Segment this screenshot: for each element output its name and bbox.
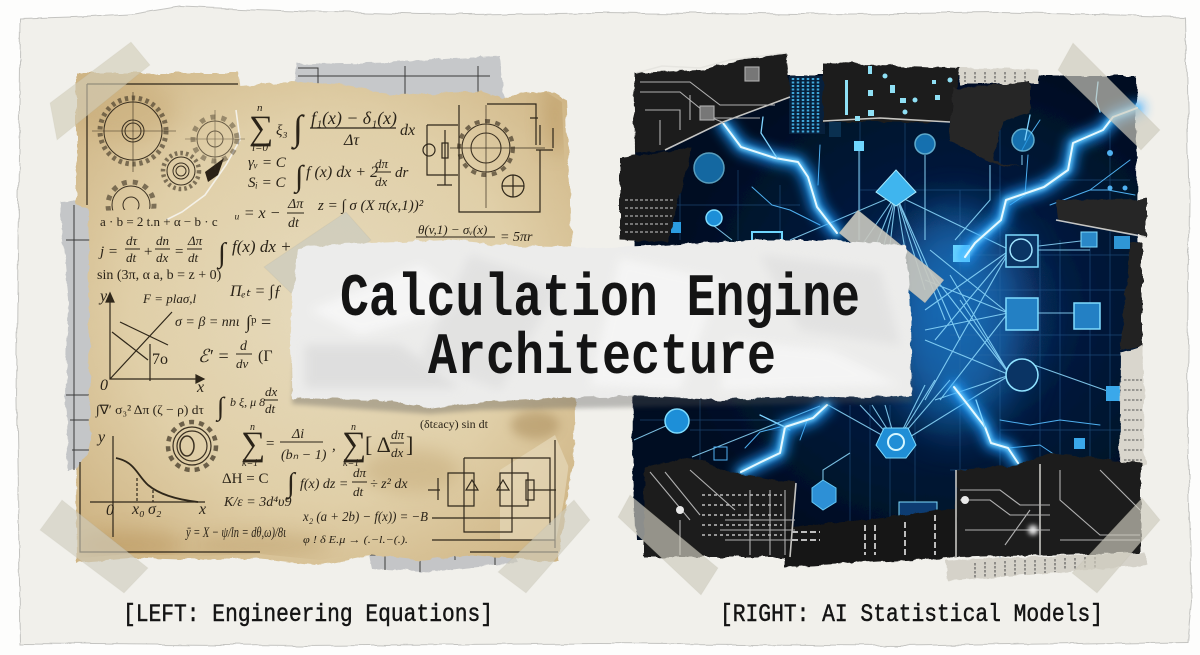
burn mark [205, 158, 224, 182]
equations: Δi [291, 427, 304, 442]
equations: Δτ [343, 132, 360, 149]
equations: ∫∇′ σ₃² Δπ (ζ − ρ) dτ [95, 402, 204, 418]
equations: k=1 [343, 458, 359, 469]
equations [95, 102, 533, 546]
equations: ∫ᵖ = [245, 312, 271, 333]
tape: behind title [264, 210, 944, 303]
equations: j = [98, 244, 118, 260]
equations: dt [288, 216, 300, 231]
title: Architecture [428, 326, 776, 391]
equations: (δtεacy) sin dt [420, 417, 489, 431]
equations: sin (3π, α a, b = z + 0) [97, 268, 222, 283]
equations: dr [395, 165, 408, 181]
equations: ] [406, 432, 413, 457]
graph: vector axes [98, 288, 204, 396]
equations: ᵤ = x − [234, 205, 280, 222]
equations: Δπ [187, 233, 203, 248]
equations: dt [353, 484, 364, 499]
tape: right panel corners [618, 43, 1160, 595]
graph: decay curve: σ₂ [148, 501, 162, 518]
navy circuit field [633, 76, 1138, 540]
graph: decay curve [90, 429, 206, 537]
equations: dx [400, 122, 415, 139]
blue code column [789, 76, 841, 137]
equations: (Γ [258, 348, 273, 365]
nodes [665, 129, 1130, 518]
equations: z = ∫ σ (X π(x,1))² [317, 198, 424, 214]
equations: ∫ [216, 238, 228, 270]
equations: ∫ [215, 392, 226, 422]
equations: φ ! δ E.μ → (.−l.−(.). [303, 534, 408, 546]
stains [75, 80, 570, 559]
equations: dπ [375, 156, 388, 171]
newspaper print [965, 72, 1142, 578]
equations: b ξ, μ 8 [230, 395, 265, 409]
equations: F = plaσ,l [142, 291, 196, 306]
graph: decay curve: 0 [106, 502, 114, 519]
equations: ∑ [249, 110, 273, 147]
equations: n [351, 422, 356, 433]
equations: ∫ [285, 468, 297, 500]
equations: f₁(x) − δ₁(x) [311, 108, 397, 129]
equations: (bₙ − 1) [281, 448, 327, 463]
equations: ξ₃ [276, 123, 288, 139]
equations: Πₑₜ = ∫ƒ [229, 283, 282, 301]
torn parchment sheets [76, 73, 576, 565]
equations: = [265, 436, 275, 452]
equations: f (x) dx + 2 [306, 164, 378, 181]
graph: vector axes: x [196, 379, 204, 396]
graph: decay curve: x₀ [131, 501, 145, 518]
equations: dt [126, 250, 136, 265]
equations: dx [375, 174, 388, 189]
caption: right: [RIGHT: AI Statistical Models] [720, 600, 1103, 629]
equations: dv [236, 356, 248, 371]
equations: d [240, 339, 248, 354]
panel: AI statistical models (right) [618, 43, 1160, 595]
graph paper scraps behind left sheet [60, 56, 518, 572]
equations: dπ [391, 427, 404, 442]
equations: dx [391, 445, 404, 460]
torn dark scraps [620, 53, 1146, 582]
equations: ∑ [241, 426, 265, 463]
equations: θ(v,1) − σᵥ(x) [418, 222, 487, 237]
tape: left panel corners [40, 42, 590, 593]
equations: i=0 [252, 142, 268, 154]
equations: f(x) dx + [232, 237, 292, 256]
crumple folds [305, 255, 900, 390]
equations: σ = β = nnι [175, 315, 240, 330]
equations: dt [265, 401, 276, 416]
equations: dt [188, 250, 198, 265]
equations: k=1 [242, 458, 258, 469]
equations: [ Δ [365, 432, 391, 457]
equations: ΔH = C [222, 471, 268, 487]
graph: decay curve: y [96, 429, 106, 446]
equations: , [332, 438, 336, 454]
equations: Δπ [287, 197, 304, 212]
equations: ÷ z² dx [370, 477, 408, 492]
equations: dx [156, 250, 168, 265]
central blue glow [890, 210, 1020, 430]
equations: x₂ (a + 2b) − f(x)) = −B [302, 510, 428, 525]
data dots on scraps [845, 66, 952, 121]
faint bolts branches [745, 120, 1135, 455]
title [340, 266, 860, 391]
equations: f(x) dz = [300, 477, 348, 492]
tear with white edge [166, 110, 240, 220]
frame lines [80, 84, 558, 552]
graph: vector axes: 0 [100, 377, 108, 394]
graph: decay curve: x [198, 501, 206, 518]
equations: dτ [126, 233, 138, 248]
equations: Sᵢ = C [248, 175, 286, 191]
equations: γᵥ = C [248, 155, 287, 171]
graph: vector axes: y [98, 288, 108, 305]
panel: engineering equations (left) [40, 42, 590, 593]
equations: K/ε = 3d⁴υ9 [223, 495, 291, 510]
equations: dπ [353, 465, 366, 480]
title: Calculation Engine [340, 266, 860, 334]
equations: n [250, 422, 255, 433]
graph: vector axes: 7o [152, 351, 168, 368]
title paper [290, 240, 912, 414]
equations: n [257, 102, 263, 114]
equations: dn [156, 233, 169, 248]
equations: ∑ [342, 426, 366, 463]
equations: a · b = 2 t.n + α − b · c [100, 214, 218, 229]
circuit diagram: top right [423, 104, 553, 212]
circuit diagram: lower right [428, 458, 556, 540]
equations: ȳ = X − ψ/ln = dθ,ω)/8ι [185, 525, 286, 541]
equations: ∫ [291, 108, 305, 150]
equations: dx [265, 384, 278, 399]
icon: gears [92, 92, 545, 470]
circuit traces on scraps [640, 67, 1140, 555]
equations: = [174, 244, 184, 260]
equations: + [143, 244, 153, 260]
equations: = 5πr [500, 230, 533, 245]
equations: ∫ [293, 160, 305, 195]
equations: ℰ′ = [198, 346, 229, 366]
grid lines [640, 120, 1130, 560]
torn scrap edges [636, 53, 1146, 557]
network lines [634, 150, 1113, 480]
caption: left: [LEFT: Engineering Equations] [123, 600, 493, 629]
lightning bolts [723, 82, 1137, 472]
